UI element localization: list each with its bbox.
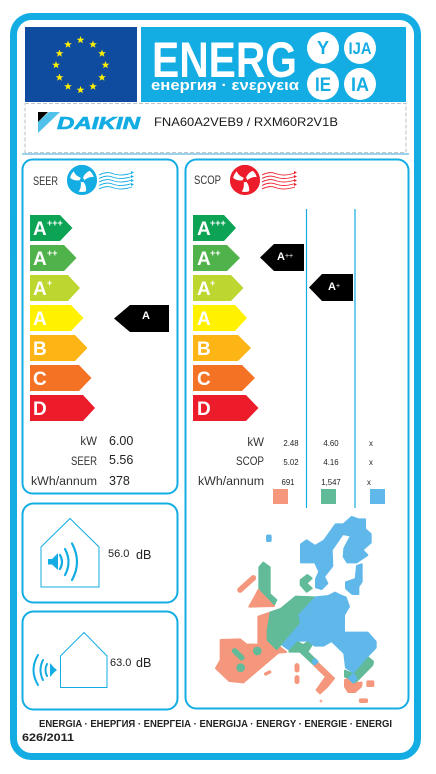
rating scale: SEER: + — [47, 278, 52, 288]
energy header banner — [141, 27, 406, 102]
SCOP values table: kW — [247, 437, 264, 449]
energy header banner: Y — [317, 38, 329, 58]
rating scale: SCOP: A — [197, 249, 211, 270]
rating scale: SEER: B — [33, 339, 47, 360]
rating scale: SCOP: + — [210, 278, 215, 288]
SCOP values table: 691 — [281, 478, 295, 487]
indoor noise value: dB — [136, 548, 151, 562]
SCOP values table: kWh/annum — [198, 476, 264, 488]
SCOP values table: 5.02 — [283, 458, 299, 467]
energy header banner: IA — [351, 75, 369, 96]
climate map of Europe — [216, 517, 376, 702]
rating scale: SCOP: D — [197, 399, 211, 420]
energy header banner: IE — [315, 75, 331, 96]
rating scale: SEER — [30, 215, 95, 421]
indoor noise value — [108, 548, 151, 562]
rating scale: SEER: D — [33, 399, 47, 420]
energy header banner: ENERG — [152, 32, 297, 88]
SEER values: 378 — [109, 474, 130, 488]
SCOP values table: 2.48 — [283, 439, 299, 448]
rating marker: A+ — [309, 274, 353, 301]
regulation number: 626/2011 — [22, 732, 74, 744]
icon: house with speaker outside — [34, 632, 107, 688]
rating scale: SEER: ++ — [47, 248, 58, 258]
EU flag — [25, 27, 137, 102]
icon: blue fan with cool air — [64, 165, 134, 196]
outdoor noise value: 63.0 — [110, 657, 131, 669]
rating scale: SCOP: C — [197, 369, 211, 390]
rating scale: SEER: A — [33, 309, 47, 330]
icon: house with speaker inside — [41, 518, 99, 587]
rating scale: SEER: +++ — [47, 218, 63, 228]
energy header banner: енергия · ενεργεια — [151, 77, 300, 94]
rating marker: A++: ++ — [285, 253, 293, 260]
rating scale: SEER: A — [33, 279, 47, 300]
rating scale: SCOP — [193, 215, 258, 421]
rating scale: SCOP: A — [197, 309, 211, 330]
SCOP values table: 1,547 — [321, 478, 341, 487]
climate zone swatches — [273, 489, 385, 504]
panel: indoor noise — [22, 504, 178, 602]
rating scale: SCOP: ++ — [210, 248, 221, 258]
rating scale: SCOP: A — [197, 279, 211, 300]
average zone — [235, 563, 373, 683]
SCOP values table — [198, 437, 373, 488]
rating scale: SCOP: A — [197, 219, 211, 240]
rating scale: SCOP: +++ — [210, 218, 226, 228]
SCOP heading: SCOP — [194, 173, 221, 187]
footer languages line: ENERGIA · ЕНЕРГИЯ · ΕΝΕΡΓΕΙΑ · ENERGIJA · ENERGY · ENERGIE · ENERGI — [39, 718, 392, 730]
panel: SEER cooling — [22, 160, 178, 494]
SCOP values table: 4.60 — [323, 439, 339, 448]
SCOP values table: SCOP — [236, 456, 264, 468]
icon: red fan with warm air — [227, 165, 297, 196]
supplier and model box — [25, 104, 406, 152]
warm zone — [216, 578, 373, 702]
SEER heading: SEER — [33, 174, 58, 188]
rating scale: SCOP: B — [197, 339, 211, 360]
rating marker: A++: A — [277, 251, 285, 263]
SEER values: 5.56 — [109, 453, 133, 467]
supplier and model box: DAIKIN — [57, 113, 140, 133]
SEER values: kWh/annum — [31, 476, 97, 488]
rating marker: A+: A — [328, 281, 336, 293]
rating marker: A: A — [142, 310, 150, 322]
supplier and model box: FNA60A2VEB9 / RXM60R2V1B — [154, 115, 338, 129]
SCOP values table: x — [369, 439, 373, 448]
SEER values: 6.00 — [109, 434, 133, 448]
rating marker: A++ — [260, 244, 304, 271]
SCOP values table: x — [369, 458, 373, 467]
rating scale: SEER: A — [33, 219, 47, 240]
panel: outdoor noise — [22, 612, 178, 710]
panel: SCOP heating — [186, 160, 408, 708]
SEER values: SEER — [71, 456, 97, 468]
outdoor noise value — [110, 656, 151, 670]
SCOP values table: 4.16 — [323, 458, 339, 467]
SEER values: kW — [80, 436, 97, 448]
indoor noise value: 56.0 — [108, 548, 129, 560]
rating scale: SEER: C — [33, 369, 47, 390]
outdoor noise value: dB — [136, 656, 151, 670]
SEER values — [31, 434, 133, 488]
rating marker: A+: + — [336, 283, 340, 290]
rating marker: A — [114, 305, 169, 332]
rating scale: SEER: A — [33, 249, 47, 270]
energy header banner: IJA — [348, 39, 372, 58]
cold zone — [267, 517, 376, 682]
SCOP values table: x — [367, 478, 371, 487]
